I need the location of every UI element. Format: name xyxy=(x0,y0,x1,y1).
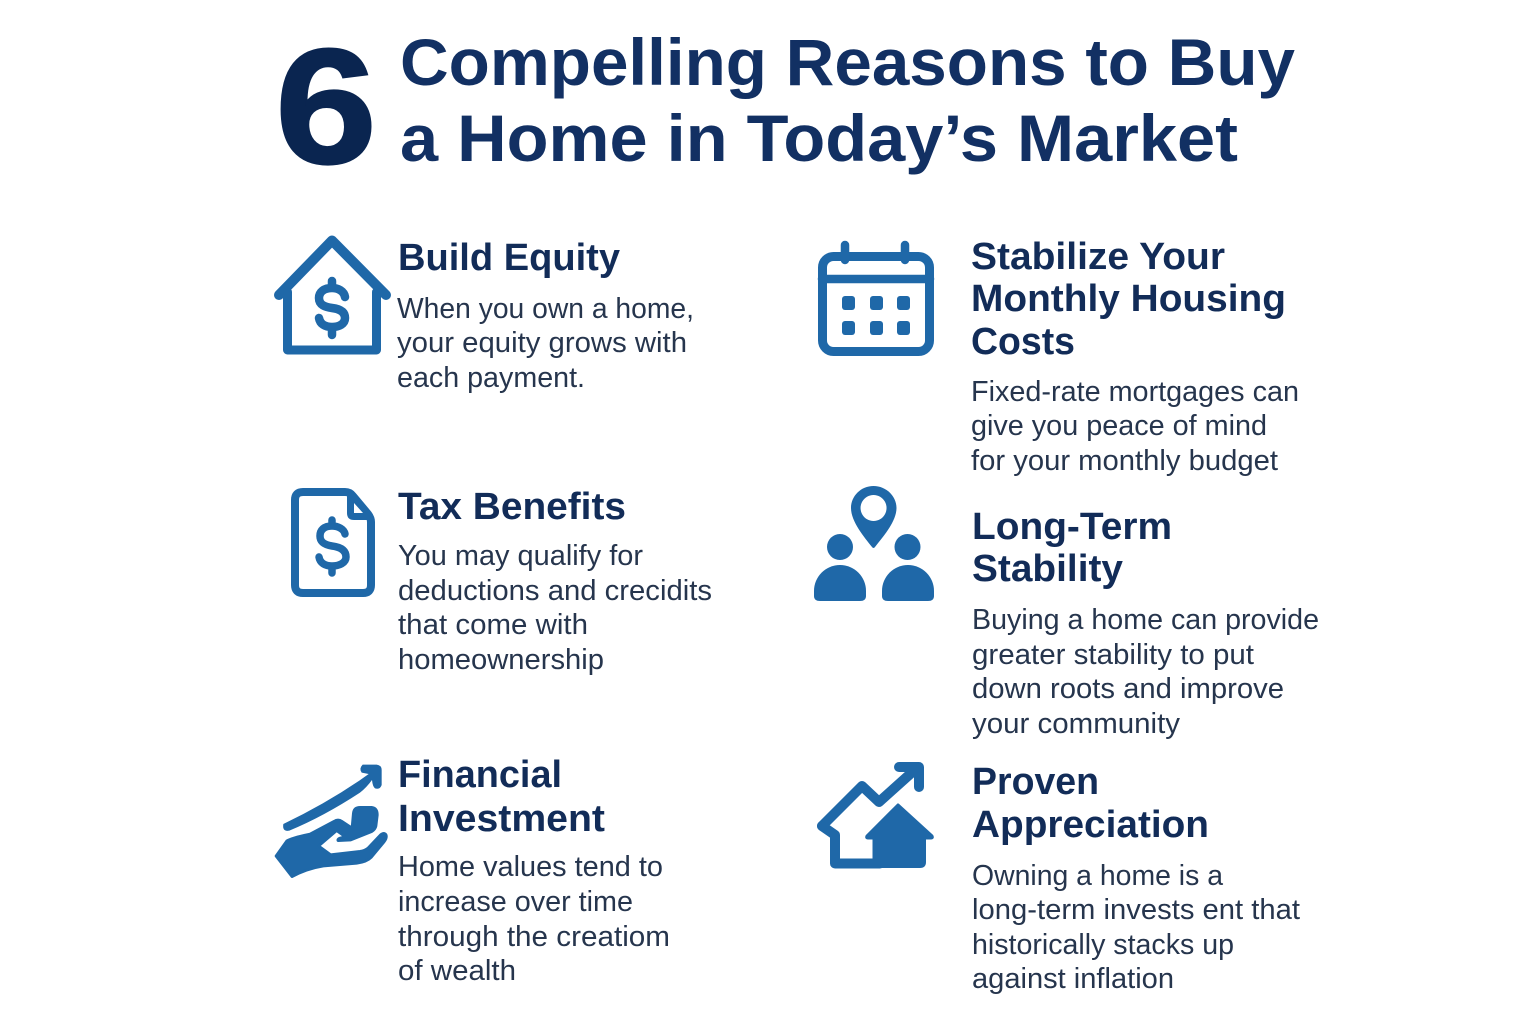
big number 6: 6 xyxy=(275,15,377,198)
icon: hand with rising arrow xyxy=(276,765,386,877)
panel: proven appreciation xyxy=(822,761,1300,995)
heading: Monthly Housing xyxy=(971,278,1286,320)
heading: Investment xyxy=(398,798,605,840)
heading xyxy=(972,761,1209,846)
title line 1: Compelling Reasons to Buy xyxy=(400,25,1295,99)
body text: deductions and crecidits xyxy=(398,575,712,607)
body text: through the creatiom xyxy=(398,921,670,953)
icon: house with dollar xyxy=(279,240,386,350)
body text: historically stacks up xyxy=(972,929,1234,961)
heading xyxy=(971,236,1286,363)
body text: When you own a home, xyxy=(397,293,694,325)
heading xyxy=(972,506,1172,590)
panel: long-term stability xyxy=(814,486,1319,740)
body text xyxy=(972,860,1300,995)
body text: Owning a home is a xyxy=(972,860,1224,892)
heading: Stability xyxy=(972,548,1123,590)
heading xyxy=(398,754,605,840)
body text xyxy=(398,851,670,987)
heading: Appreciation xyxy=(972,804,1209,846)
body text xyxy=(972,604,1319,740)
body text: of wealth xyxy=(398,955,516,987)
panel: build equity xyxy=(279,237,694,394)
body text: each payment. xyxy=(397,362,585,394)
body text: your community xyxy=(972,708,1181,740)
title xyxy=(275,15,1295,198)
heading: Proven xyxy=(972,761,1099,803)
body text: increase over time xyxy=(398,886,633,918)
body text: for your monthly budget xyxy=(971,445,1278,477)
body text xyxy=(397,293,694,394)
body text: You may qualify for xyxy=(398,540,643,572)
icon: house with rising arrow xyxy=(822,767,932,866)
body text: greater stability to put xyxy=(972,639,1254,671)
title line 2: a Home in Today’s Market xyxy=(400,101,1238,175)
body text: down roots and improve xyxy=(972,673,1284,705)
panel: tax benefits xyxy=(295,486,712,676)
panel: stabilize monthly costs xyxy=(822,236,1299,477)
icon: calendar xyxy=(822,245,930,352)
panel: financial investment xyxy=(276,754,670,987)
body text xyxy=(971,376,1299,477)
body text: that come with xyxy=(398,609,588,641)
icon: location pin with people xyxy=(814,486,934,601)
heading: Stabilize Your xyxy=(971,236,1225,278)
heading: Costs xyxy=(971,321,1075,363)
body text: Home values tend to xyxy=(398,851,663,883)
heading: Financial xyxy=(398,754,562,796)
heading: Build Equity xyxy=(398,237,620,279)
body text xyxy=(398,540,712,676)
body text: against inflation xyxy=(972,963,1174,995)
heading: Long-Term xyxy=(972,506,1172,548)
icon: document with dollar xyxy=(295,492,371,593)
body text: Buying a home can provide xyxy=(972,604,1319,636)
body text: give you peace of mind xyxy=(971,410,1267,442)
body text: your equity grows with xyxy=(397,327,687,359)
heading: Tax Benefits xyxy=(398,486,626,528)
body text: homeownership xyxy=(398,644,604,676)
body text: long-term invests ent that xyxy=(972,894,1300,926)
body text: Fixed-rate mortgages can xyxy=(971,376,1299,408)
